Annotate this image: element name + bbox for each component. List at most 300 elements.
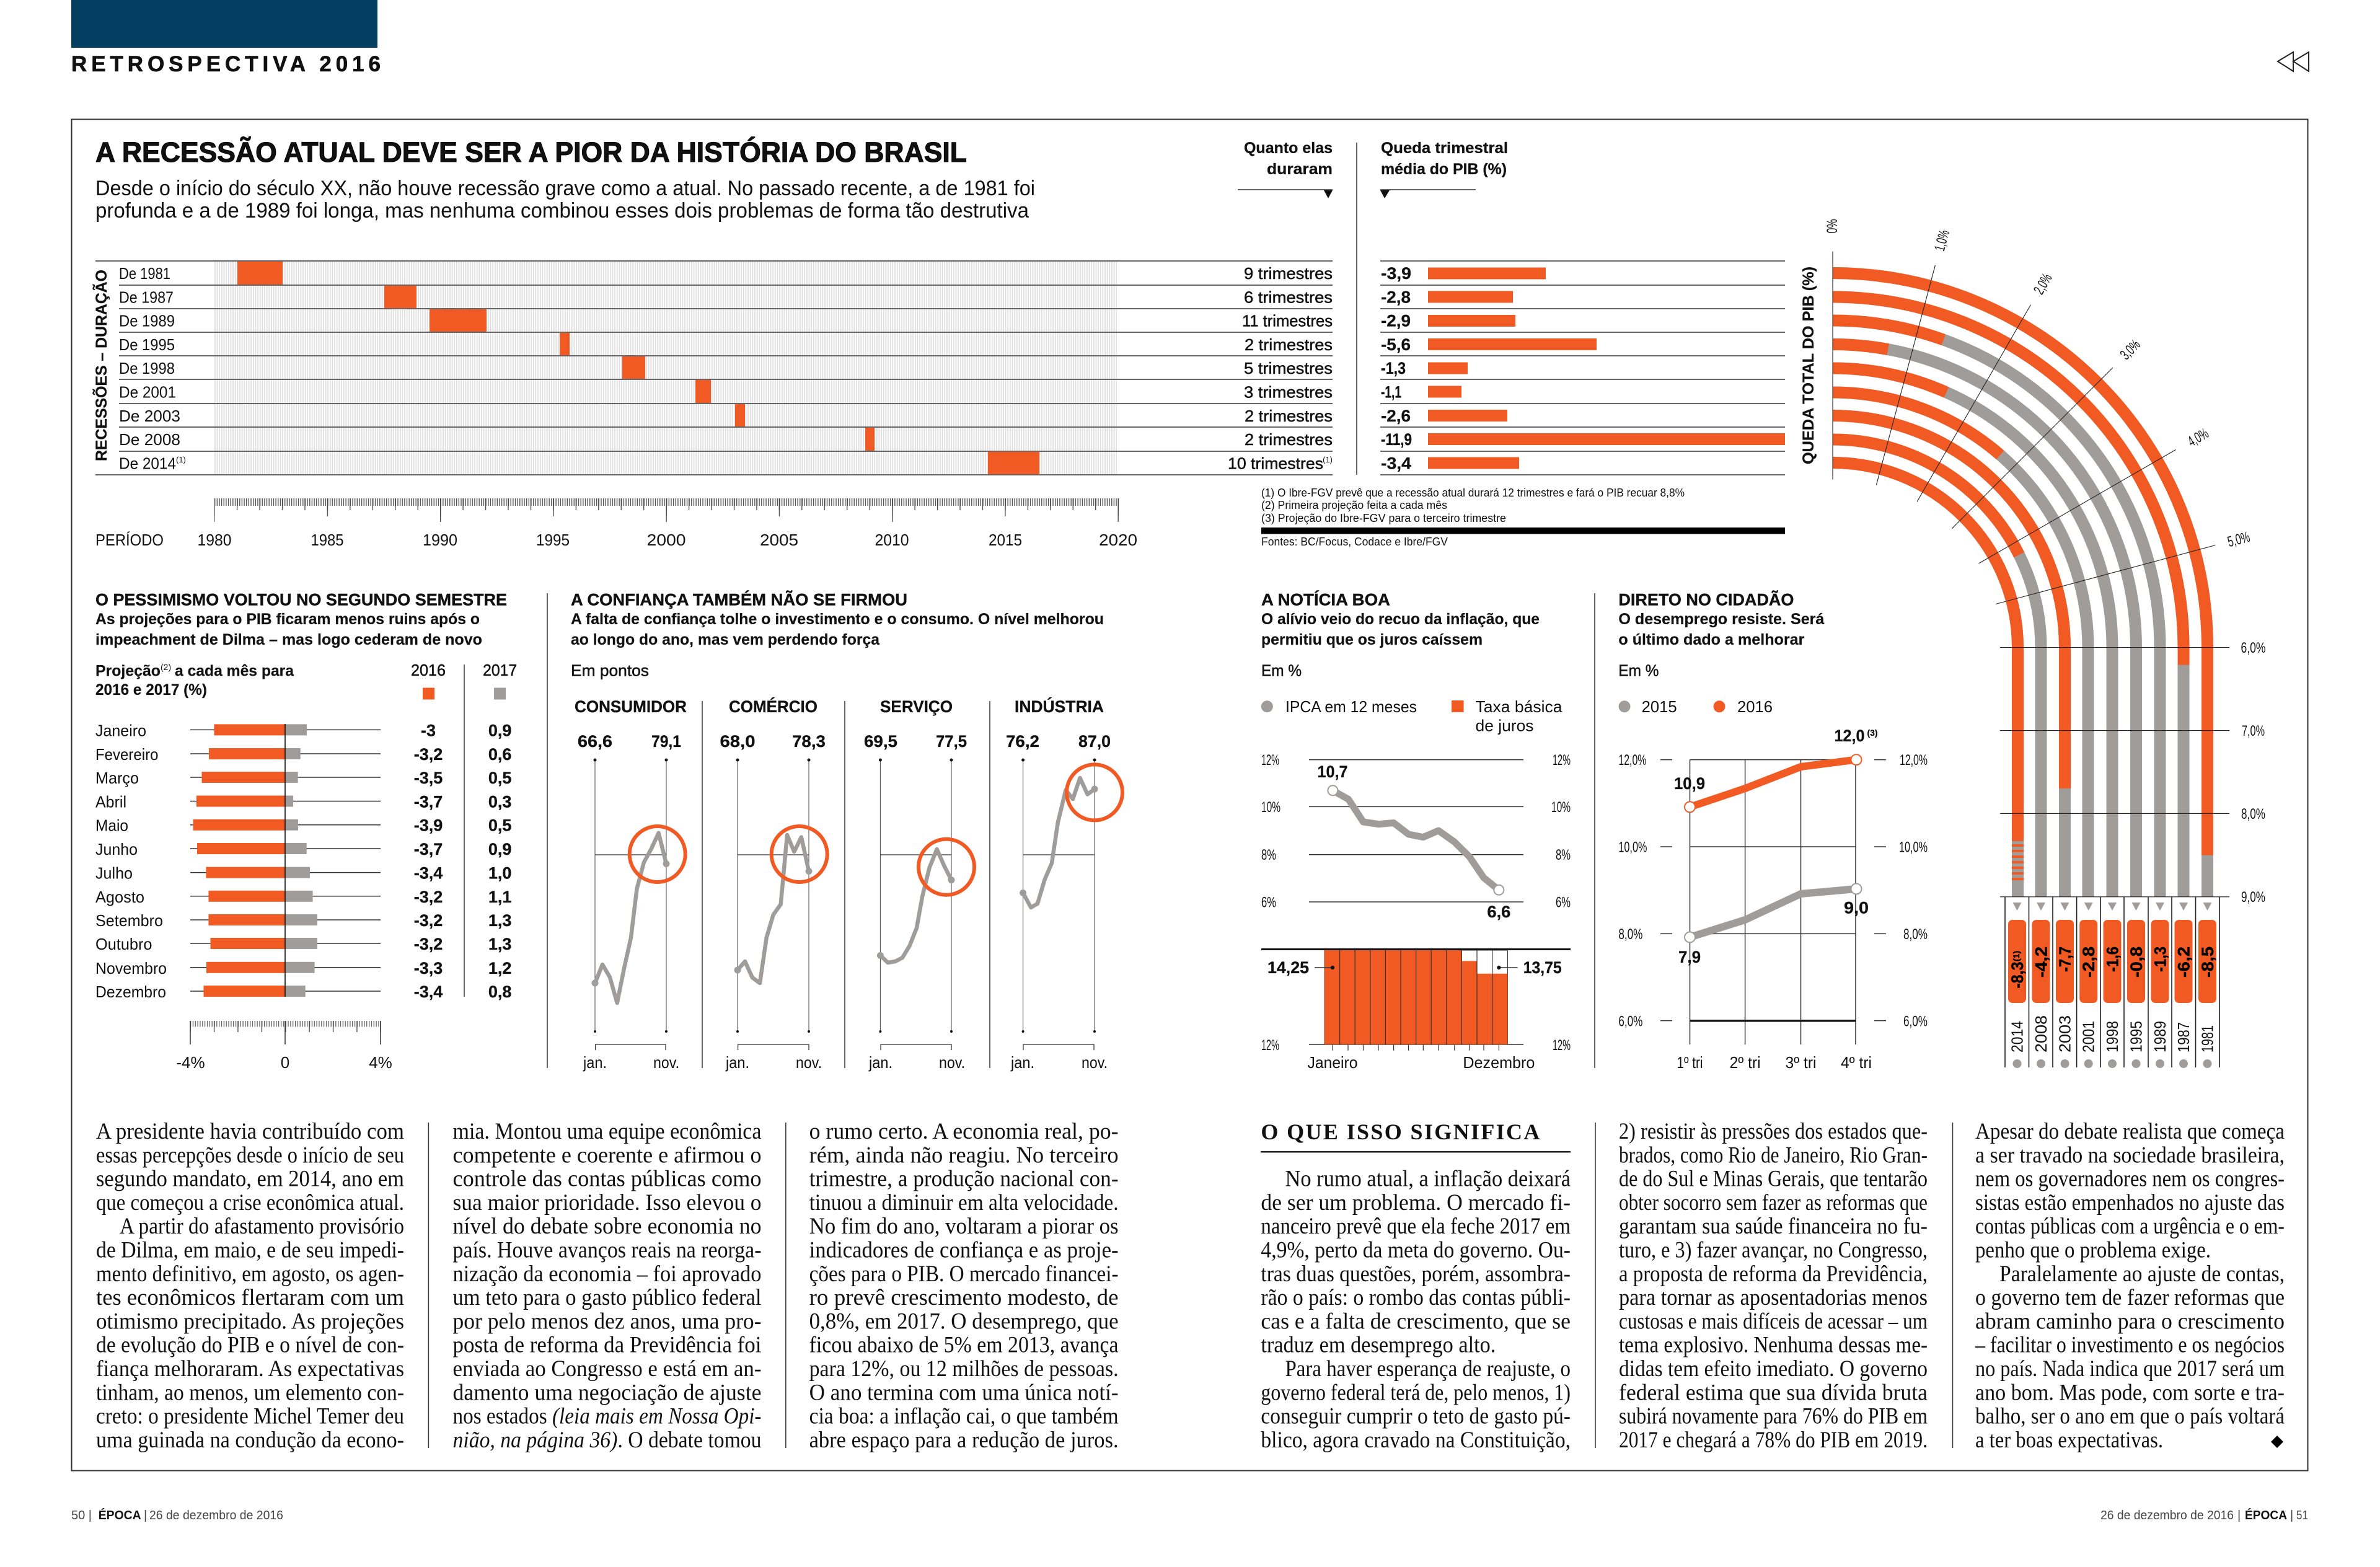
small multiple headings: INDÚSTRIA [1015, 697, 1104, 716]
value labels: 10,9 [1674, 774, 1705, 793]
panel: inflation and interest rate: 10% [1551, 799, 1571, 816]
body text column 4: conseguir cumprir o teto de gasto pú- [1261, 1404, 1571, 1429]
legend columns: 2017 [483, 661, 517, 679]
subtitle: Desde o início do século XX, não houve recessão grave como a atual. No passado recente, a de 1981 foi [95, 177, 1035, 200]
start and end values [578, 732, 1111, 751]
body text column 2: nível do debate sobre economia no [452, 1214, 761, 1239]
2017 values [488, 721, 511, 1001]
panel: how long they lasted: 10 trimestres [1228, 454, 1323, 472]
row labels: De 2014 [119, 454, 176, 472]
vertical axis title: RECESSÕES – DURAÇÃO [92, 270, 110, 461]
body text column 1: essas percepções desde o início de seu [96, 1142, 404, 1168]
legend: 2015 [1642, 697, 1677, 716]
chart frames [594, 759, 1096, 1050]
2016 values: -3,9 [414, 816, 443, 835]
recession duration bars [237, 262, 1039, 474]
month labels: Janeiro [95, 721, 146, 739]
body text column 5: garantam sua saúde financeira no fu- [1619, 1214, 1928, 1239]
footer right: | [2290, 1509, 2293, 1522]
footer right: | [2237, 1509, 2241, 1522]
horizontal bars [1428, 268, 1785, 469]
body text column 1: otimismo precipitado. As projeções [96, 1309, 404, 1334]
scale labels: 1,0% [1931, 228, 1953, 253]
start and end values: 76,2 [1006, 732, 1039, 751]
month labels: jan. [725, 1053, 749, 1072]
month labels: Junho [95, 840, 138, 859]
month labels: Abril [95, 792, 126, 811]
quarter labels: 1º tri [1677, 1053, 1703, 1072]
body text column 5: tema explosivo. Nenhuma dessas me- [1619, 1333, 1928, 1358]
orange value pills [2008, 920, 2216, 1003]
small multiple headings: SERVIÇO [880, 697, 953, 716]
projected stripes 2014 [2012, 841, 2024, 878]
body text column 5 [1619, 1119, 1928, 1453]
body text column 4: traduz em desemprego alto. [1261, 1333, 1496, 1358]
2017 values: 0,9 [488, 840, 511, 859]
2017 values: 0,9 [488, 721, 511, 739]
body text column 3: abre espaço para a redução de juros. [809, 1428, 1119, 1453]
footer left: 26 de dezembro de 2016 [149, 1509, 283, 1522]
body text column 6: a ser travado na sociedade brasileira, [1975, 1142, 2285, 1168]
body text column 2: controle das contas públicas como [452, 1167, 761, 1192]
value labels: -2,9 [1381, 312, 1411, 330]
panel: unemployment: 6,0% [1903, 1013, 1928, 1030]
pointers [2013, 903, 2211, 911]
2017 values: 1,2 [488, 959, 511, 978]
body text column 2: enviada ao Congresso e está em an- [452, 1356, 761, 1382]
2017 values: 0,3 [488, 792, 511, 811]
chart caption [95, 662, 294, 699]
2017 values: 1,0 [488, 864, 511, 883]
body text column 6: a ter boas expectativas. [1975, 1428, 2163, 1453]
value labels: 7,9 [1678, 948, 1701, 966]
chart: total GDP fall, curved bars: 7,0% [2242, 723, 2265, 739]
footnotes and sources: Fontes: BC/Focus, Codace e Ibre/FGV [1261, 536, 1448, 548]
body text column 4: tras duas questões, porém, assombra- [1261, 1261, 1571, 1287]
row labels: De 2001 [119, 383, 176, 402]
body text column 1 [96, 1119, 404, 1453]
body text column 4: blico, agora cravado na Constituição, [1261, 1428, 1571, 1453]
panel: GDP projections by month [95, 591, 517, 1072]
panel: unemployment [1618, 590, 1928, 1072]
panel: how long they lasted: 2 trimestres [1245, 335, 1333, 354]
percent axis: 4% [369, 1053, 392, 1072]
start and end values: 68,0 [720, 732, 755, 751]
axis labels [1261, 752, 1280, 1054]
IPCA values: 10,7 [1318, 762, 1347, 781]
panel: unemployment: 12,0% [1900, 752, 1928, 769]
month labels: Agosto [95, 888, 144, 906]
body text column 2: sua maior prioridade. Isso elevou o [452, 1190, 761, 1216]
body text column 1: tinham, ao menos, um elemento con- [96, 1380, 404, 1405]
total fall values: -7,7 [2056, 947, 2074, 972]
panel: how long they lasted: 5 trimestres [1244, 359, 1333, 377]
scale labels: 0% [1824, 219, 1841, 233]
2017 bars [285, 724, 317, 997]
chart: total GDP fall, curved bars [1800, 219, 2266, 1068]
chart title: QUEDA TOTAL DO PIB (%) [1800, 267, 1817, 464]
chart caption: Em % [1618, 661, 1659, 680]
month labels: jan. [583, 1053, 607, 1072]
percent axis: -4% [176, 1053, 205, 1072]
panel: inflation and interest rate [1261, 590, 1571, 1072]
panel: timeline of recessions [92, 261, 1333, 549]
body text column 1: uma guinada na condução da econo- [96, 1428, 404, 1453]
body text column 2: um teto para o gasto público federal [452, 1285, 761, 1310]
radial scale lines [1833, 252, 2229, 897]
panel intro [1261, 611, 1540, 648]
body text column 5: para tornar as aposentadorias menos [1619, 1285, 1928, 1310]
panel: unemployment: 10,0% [1899, 839, 1928, 856]
month labels: Julho [95, 864, 133, 883]
grid [1660, 760, 1886, 1044]
body text column 6: ano bom. Mas pode, com sorte e tra- [1975, 1380, 2285, 1405]
period axis: 2020 [1099, 531, 1137, 549]
period axis: 1995 [536, 531, 570, 549]
panel intro: A falta de confiança tolhe o investimento e o consumo. O nível melhorou [571, 611, 1104, 628]
panel: inflation and interest rate: 12% [1553, 752, 1571, 769]
percent axis [176, 1021, 392, 1072]
month labels: jan. [868, 1053, 892, 1072]
body text column 3: No fim do ano, voltaram a piorar os [809, 1214, 1119, 1239]
start and end values: 87,0 [1078, 732, 1111, 751]
scale labels [1824, 219, 2252, 550]
row labels: De 2008 [119, 430, 180, 449]
body text column 5: brados, como Rio de Janeiro, Rio Gran- [1619, 1142, 1928, 1168]
total fall values: -2,8 [2079, 947, 2098, 978]
year labels [2008, 1015, 2216, 1053]
panel: how long they lasted: duraram [1267, 161, 1333, 178]
panel intro: o último dado a melhorar [1618, 631, 1805, 648]
panel intro: impeachment de Dilma – mas logo cederam de novo [95, 631, 482, 648]
year labels: 1987 [2174, 1022, 2193, 1053]
month labels: Janeiro [1308, 1053, 1357, 1072]
2017 values: 1,3 [488, 911, 511, 930]
scale labels: 3,0% [2117, 337, 2144, 363]
chart caption: Projeção [95, 663, 161, 680]
body text column 6: – facilitar o investimento e os negócios [1975, 1333, 2285, 1358]
column dividers [2005, 897, 2219, 1067]
row labels: De 1987 [119, 288, 174, 306]
panel: how long they lasted: 3 trimestres [1244, 383, 1333, 402]
2017 values: 1,3 [488, 935, 511, 953]
scale labels: 2,0% [2030, 271, 2056, 298]
start and end values: 79,1 [651, 732, 681, 751]
quarter labels: 3º tri [1785, 1053, 1816, 1072]
body text column 5: 2017 e chegará a 78% do PIB em 2019. [1619, 1428, 1928, 1453]
panel intro: ao longo do ano, mas vem perdendo força [571, 631, 880, 648]
legend [1619, 697, 1773, 716]
period axis: PERÍODO [95, 531, 164, 549]
bars: interest rate [1261, 948, 1571, 1051]
month labels: Outubro [95, 935, 152, 953]
body text column 3 [809, 1119, 1119, 1453]
panel: unemployment: 8,0% [1903, 926, 1928, 943]
value labels: -2,6 [1381, 407, 1411, 425]
month labels [1308, 1053, 1535, 1072]
quarter labels: 2º tri [1730, 1053, 1761, 1072]
body text column 4 [1261, 1167, 1571, 1453]
total fall values: -1,3 [2151, 947, 2169, 972]
body text column 2: por pelo menos dez anos, uma pro- [452, 1309, 761, 1334]
total fall values: (1) [2011, 951, 2021, 961]
body text column 1: que começou a crise econômica atual. [96, 1190, 404, 1216]
year labels: 1989 [2151, 1021, 2169, 1053]
body text column 1: segundo mandato, em 2014, ano em [96, 1167, 404, 1192]
body text column 2: posta de reforma da Previdência foi [452, 1333, 761, 1358]
body text column 2: nização da economia – foi aprovado [452, 1261, 761, 1287]
value labels: -2,8 [1381, 288, 1411, 306]
panel: how long they lasted [1228, 139, 1333, 472]
footer left: | [144, 1509, 147, 1522]
footnotes and sources [1261, 487, 1785, 548]
total fall values [2008, 947, 2217, 988]
month labels: nov. [653, 1053, 679, 1072]
IPCA values [1318, 762, 1510, 921]
line: industria [1020, 764, 1122, 907]
month labels: Dezembro [1463, 1053, 1535, 1072]
body text column 4: Para haver esperança de reajuste, o [1285, 1356, 1571, 1382]
body text column 6: o governo tem de fazer reformas que [1975, 1285, 2285, 1310]
body text column 1: mento definitivo, em agosto, os agen- [96, 1261, 404, 1287]
line: consumidor [591, 826, 685, 1003]
body text column 3: para 12%, ou 12 milhões de pessoas. [809, 1356, 1119, 1382]
body text column 3: ro prevê crescimento modesto, de [809, 1285, 1119, 1310]
axis labels: 8% [1261, 847, 1276, 863]
body text column 4: cas e a falta de crescimento, que se [1261, 1309, 1571, 1334]
total fall values: -8,5 [2198, 947, 2217, 978]
period axis: 1980 [197, 531, 232, 549]
body text column 3: o rumo certo. A economia real, po- [809, 1119, 1119, 1144]
body text column 3: O ano termina com uma única notí- [809, 1380, 1119, 1405]
body text column 4: governo federal terá de, pelo menos, 1) [1261, 1380, 1571, 1405]
panel: average quarterly GDP fall: Queda trimestral [1381, 139, 1508, 157]
small multiple headings: COMÉRCIO [729, 697, 818, 716]
body text column 4: nanceiro prevê que ela feche 2017 em [1261, 1214, 1571, 1239]
start and end values: 77,5 [936, 732, 967, 751]
body text column 5: didas tem efeito imediato. O governo [1619, 1356, 1928, 1382]
body text column 2: nião, na página 36). O debate tomou [452, 1428, 761, 1453]
section label: RETROSPECTIVA 2016 [71, 52, 381, 76]
2017 values: 0,5 [488, 816, 511, 835]
section colour tab [71, 0, 377, 48]
scale labels: 4,0% [2185, 425, 2211, 450]
body text column 6: no país. Nada indica que 2017 será um [1975, 1356, 2285, 1382]
body text column 1: A partir do afastamento provisório [120, 1214, 404, 1239]
body text column 5: 2) resistir às pressões dos estados que- [1619, 1119, 1928, 1144]
month labels: nov. [1082, 1053, 1108, 1072]
panel: inflation and interest rate: 8% [1556, 847, 1571, 863]
panel: average quarterly GDP fall [1380, 139, 1785, 475]
footer left: ÉPOCA [99, 1508, 141, 1522]
chart: total GDP fall, curved bars: 8,0% [2241, 806, 2265, 823]
panel heading: DIRETO NO CIDADÃO [1618, 590, 1794, 609]
chart: total GDP fall, curved bars: 9,0% [2241, 889, 2265, 906]
axis labels: 10% [1261, 799, 1280, 816]
row labels: De 1995 [119, 335, 175, 354]
panel: how long they lasted: 2 trimestres [1245, 430, 1333, 449]
panel intro [95, 611, 482, 648]
panel: confidence indexes [571, 590, 1122, 1072]
month labels: nov. [796, 1053, 822, 1072]
panel heading: O PESSIMISMO VOLTOU NO SEGUNDO SEMESTRE [95, 591, 507, 609]
value labels: -3,4 [1381, 454, 1411, 472]
start and end values: 78,3 [792, 732, 826, 751]
total fall values: -8,3 [2008, 962, 2027, 988]
rate callouts [1267, 958, 1562, 977]
body text column 6: nem os governadores nem os congres- [1975, 1167, 2285, 1192]
period axis: 2005 [760, 531, 798, 549]
panel intro: permitiu que os juros caíssem [1261, 631, 1483, 648]
body text column 1: fiança melhoraram. As expectativas [96, 1356, 404, 1382]
month labels: Setembro [95, 911, 163, 930]
body text column 3: ficou abaixo de 5% em 2013, avança [809, 1333, 1119, 1358]
2016 values: -3,2 [414, 888, 443, 906]
row labels: De 2003 [119, 407, 180, 425]
2017 values: 0,8 [488, 982, 511, 1001]
footer right: 51 [2296, 1509, 2308, 1522]
period axis: 2010 [875, 531, 909, 549]
body text column 1: tes econômicos flertaram com um [96, 1285, 404, 1310]
total fall values: -4,2 [2032, 947, 2050, 978]
total fall values: -6,2 [2174, 947, 2193, 978]
chart: total GDP fall, curved bars: 6,0% [2241, 640, 2266, 656]
2016 values: -3,7 [414, 792, 443, 811]
legend columns [411, 661, 517, 699]
footnotes and sources: (1) O Ibre-FGV prevê que a recessão atual durará 12 trimestres e fará o PIB recuar 8,8% [1261, 487, 1685, 499]
value labels: -1,1 [1381, 383, 1401, 402]
year dots [2013, 1059, 2211, 1068]
body text column 2: competente e coerente e afirmou o [452, 1142, 761, 1168]
row labels: De 1989 [119, 312, 175, 330]
panel heading: A NOTÍCIA BOA [1261, 590, 1390, 609]
body text column 4: No rumo atual, a inflação deixará [1285, 1167, 1571, 1192]
body text column 1: de Dilma, em maio, e de seu impedi- [96, 1237, 404, 1263]
row lines [190, 730, 381, 991]
2016 values: -3 [421, 721, 436, 739]
value labels [1674, 726, 1878, 966]
year labels: 1998 [2103, 1021, 2122, 1053]
title: A RECESSÃO ATUAL DEVE SER A PIOR DA HISTÓRIA DO BRASIL [95, 136, 967, 168]
legend [1261, 697, 1562, 735]
panel heading: A CONFIANÇA TAMBÉM NÃO SE FIRMOU [571, 590, 907, 609]
legend: Taxa básica [1475, 697, 1562, 716]
body text column 3: trimestre, a produção nacional con- [809, 1167, 1119, 1192]
body text column 6 [1975, 1119, 2285, 1453]
chart caption: 2016 e 2017 (%) [95, 681, 207, 699]
panel intro [1618, 611, 1824, 648]
row labels: De 1998 [119, 359, 175, 377]
start and end values: 66,6 [578, 732, 612, 751]
body text column 6: Apesar do debate realista que começa [1975, 1119, 2285, 1144]
month labels [583, 1053, 1108, 1072]
axis labels: 12,0% [1618, 752, 1646, 769]
chart caption: (2) [161, 662, 171, 672]
body text column 5: turo, e 3) fazer avançar, no Congresso, [1619, 1237, 1928, 1263]
IPCA values: 6,6 [1487, 903, 1510, 921]
body text column 6: abram caminho para o crescimento [1975, 1309, 2285, 1334]
panel: how long they lasted: 2 trimestres [1245, 407, 1333, 425]
footnotes and sources: (2) Primeira projeção feita a cada mês [1261, 499, 1447, 511]
rate callouts: 13,75 [1523, 958, 1562, 977]
quarter labels: 4º tri [1841, 1053, 1872, 1072]
body text column 3: cia boa: a inflação cai, o que também [809, 1404, 1119, 1429]
chart caption: a cada mês para [175, 663, 294, 680]
2016 values: -3,4 [414, 864, 443, 883]
2016 values: -3,3 [414, 959, 443, 978]
body text column 5: custosas e mais difíceis de acessar – um [1619, 1309, 1928, 1334]
small multiple headings: CONSUMIDOR [575, 697, 687, 716]
2016 values [414, 721, 443, 1001]
panel intro: As projeções para o PIB ficaram menos ruins após o [95, 611, 480, 628]
panel: how long they lasted: (1) [1323, 455, 1333, 464]
chart caption: Em % [1261, 661, 1302, 680]
panel: how long they lasted: 9 trimestres [1244, 264, 1333, 283]
value labels: 9,0 [1844, 899, 1869, 917]
body text column 6: sistas estão empenhados no ajuste das [1975, 1190, 2285, 1216]
month labels: nov. [939, 1053, 965, 1072]
month labels: Novembro [95, 959, 167, 978]
row labels: (1) [176, 455, 186, 464]
total fall values: -0,8 [2127, 947, 2146, 978]
chart caption: Em pontos [571, 661, 649, 680]
body text column 6: penho que o problema exige. [1975, 1237, 2211, 1263]
body text column 2: país. Houve avanços reais na reorga- [452, 1237, 761, 1263]
scale labels: 5,0% [2226, 529, 2252, 550]
footnotes and sources: (3) Projeção do Ibre-FGV para o terceiro trimestre [1261, 512, 1506, 524]
2017 values: 1,1 [488, 888, 511, 906]
start and end values: 69,5 [864, 732, 897, 751]
panel: how long they lasted: Quanto elas [1244, 139, 1333, 157]
2016 values: -3,4 [414, 982, 443, 1001]
body text column 5: federal estima que sua dívida bruta [1619, 1380, 1928, 1405]
panel intro [571, 611, 1104, 648]
body text column 1: creto: o presidente Michel Temer deu [96, 1404, 404, 1429]
period axis: 2000 [647, 531, 685, 549]
body text column 2 [452, 1119, 761, 1453]
body text column 3: ções para o PIB. O mercado financei- [809, 1261, 1119, 1287]
small multiple headings [575, 697, 1104, 716]
year labels: 2003 [2055, 1015, 2074, 1053]
month labels [95, 721, 167, 1001]
line: 2016 [1685, 754, 1862, 812]
value labels: -5,6 [1381, 335, 1411, 354]
body text column 1: A presidente havia contribuído com [96, 1119, 404, 1144]
month labels: Maio [95, 816, 128, 835]
footer right: 26 de dezembro de 2016 [2100, 1509, 2234, 1522]
value labels: -3,9 [1381, 264, 1411, 283]
line: comercio [734, 826, 827, 983]
2017 values: 0,5 [488, 769, 511, 787]
axis labels [1618, 752, 1647, 1030]
axis labels: 12% [1261, 1037, 1279, 1054]
row labels: De 1981 [119, 264, 170, 283]
grid lines [1309, 760, 1523, 1044]
axis labels: 6% [1261, 894, 1276, 911]
axis labels: 8,0% [1618, 926, 1642, 943]
line: 2015 [1685, 884, 1862, 942]
footer left [71, 1508, 283, 1522]
total fall values: -1,6 [2104, 947, 2122, 972]
icon: rewind [2278, 52, 2309, 71]
body text column 2: mia. Montou uma equipe econômica [452, 1119, 761, 1144]
month labels: Março [95, 769, 139, 787]
axis labels: 6,0% [1618, 1013, 1642, 1030]
year labels: 2001 [2079, 1021, 2098, 1053]
legend columns: 2016 [411, 661, 446, 679]
panel: how long they lasted: 11 trimestres [1242, 312, 1333, 330]
month labels: Fevereiro [95, 745, 159, 764]
